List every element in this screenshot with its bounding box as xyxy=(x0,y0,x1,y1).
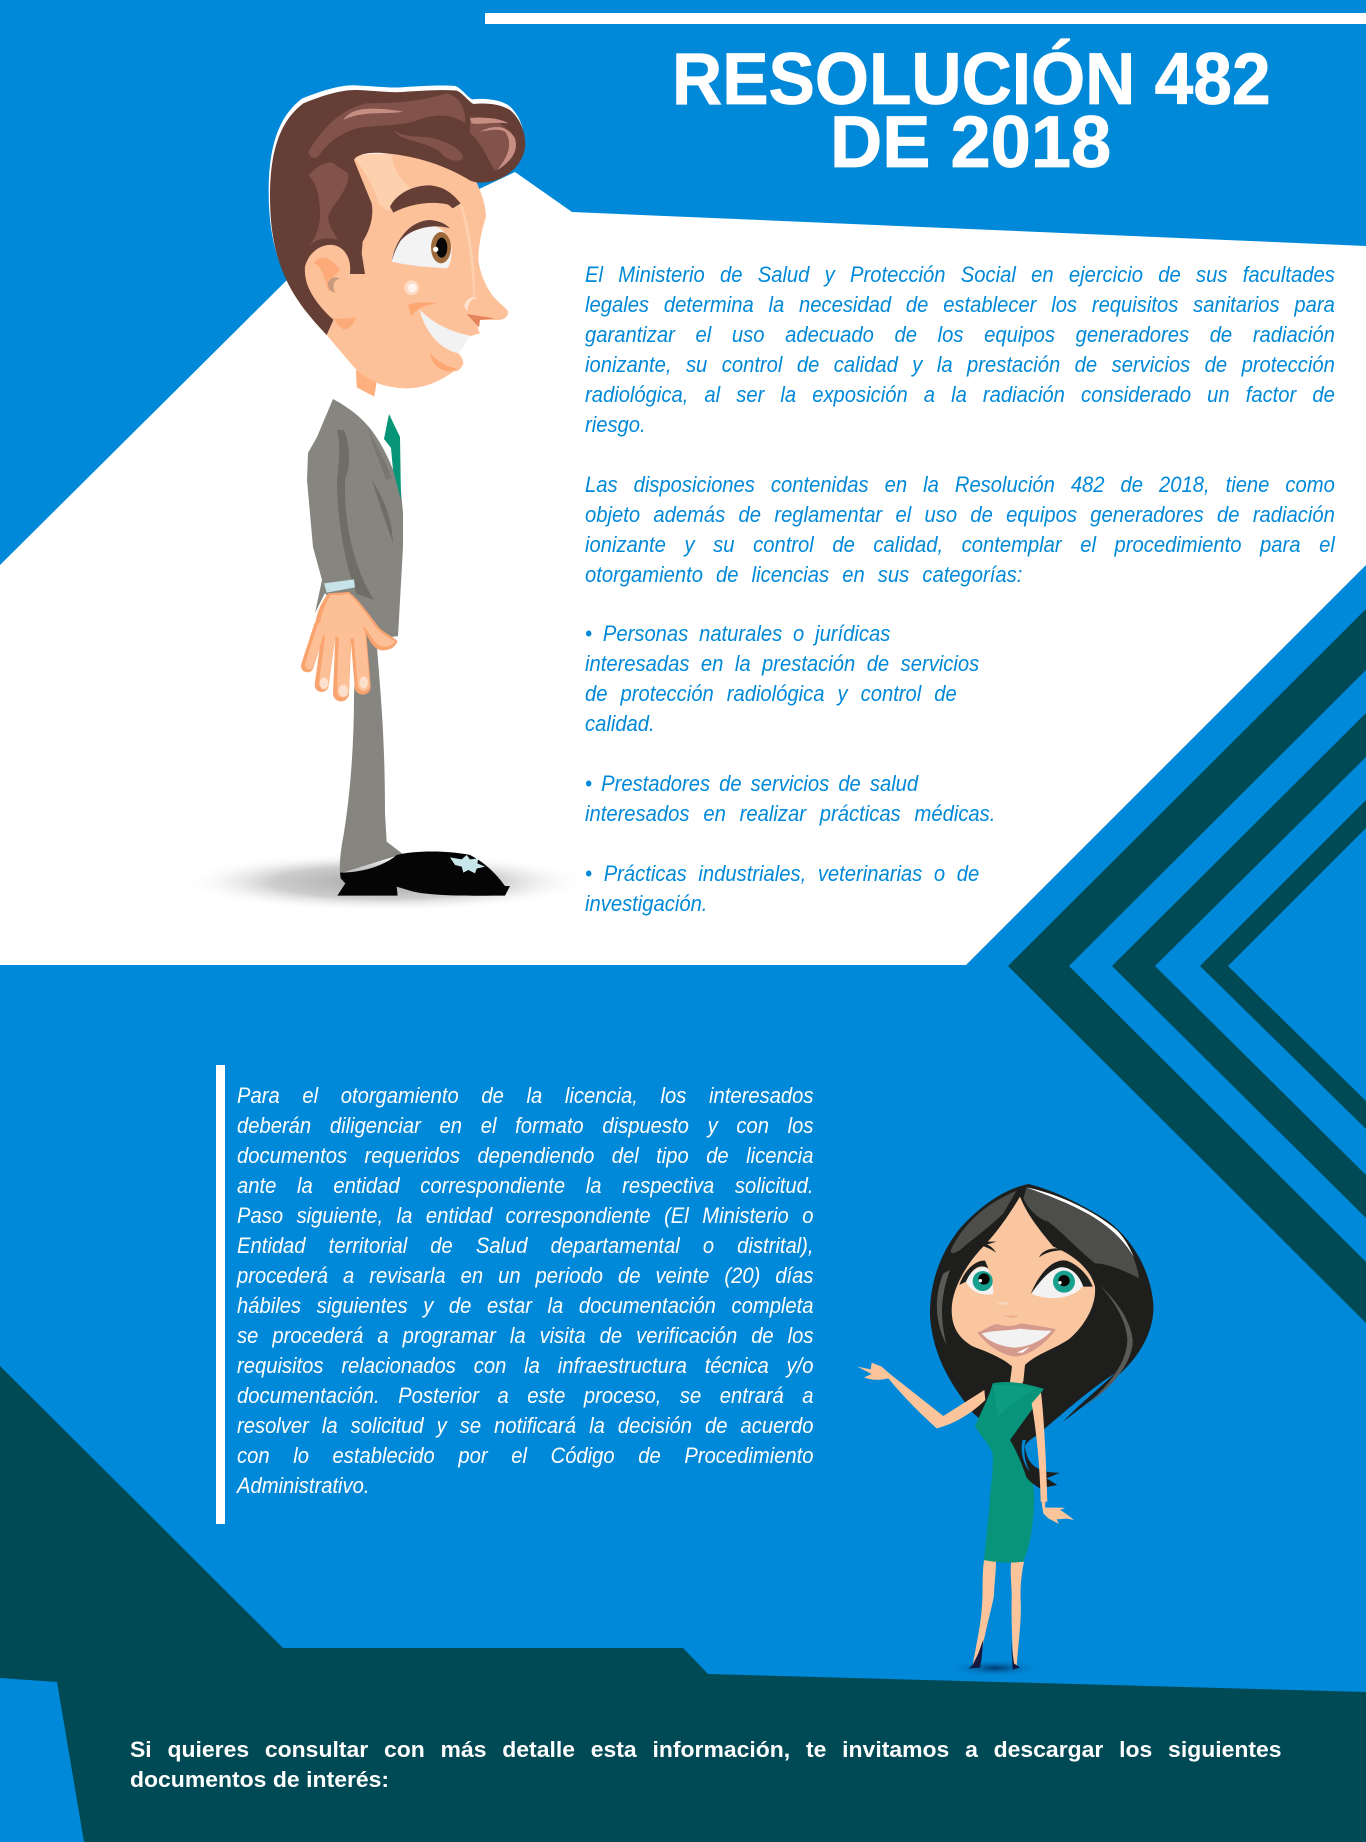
text block: licence procedure: Para el otorgamiento de la licencia, los interesados xyxy=(237,1083,814,1108)
text block: second paragraph: otorgamiento de licencias en sus categorías: xyxy=(585,562,1022,587)
text block: second paragraph: ionizante y su control de calidad, contemplar el procedimiento para el xyxy=(585,532,1335,557)
hair shine xyxy=(308,93,510,247)
text block: intro paragraph: garantizar el uso adecuado de los equipos generadores de radiación xyxy=(585,322,1335,347)
text block: licence procedure: documentos requeridos dependiendo del tipo de licencia xyxy=(237,1143,814,1168)
text block: intro paragraph: radiológica, al ser la exposición a la radiación considerado un factor de xyxy=(585,382,1335,407)
text block: bullet 2: interesados en realizar prácticas médicas. xyxy=(585,801,995,826)
woman right arm xyxy=(1032,1393,1047,1502)
woman legs xyxy=(968,1478,1074,1669)
text block: bullet 1: de protección radiológica y control de xyxy=(585,681,957,706)
man body lower xyxy=(337,623,510,896)
text block: bullet 1: • Personas naturales o jurídicas xyxy=(585,621,890,646)
text block: bullet 3: investigación. xyxy=(585,891,707,916)
text block: bullet 2 xyxy=(585,771,995,826)
white bar top xyxy=(485,13,1366,24)
illustration: man xyxy=(180,85,590,912)
text block: bullet 1: calidad. xyxy=(585,711,655,736)
forehead highlight xyxy=(355,154,412,212)
text block: licence procedure: Paso siguiente, la entidad correspondiente (El Ministerio o xyxy=(237,1203,814,1228)
text block: bullet 1: interesadas en la prestación de servicios xyxy=(585,651,979,676)
text block: licence procedure: requisitos relacionados con la infraestructura técnica y/o xyxy=(237,1353,814,1378)
hair shine xyxy=(1023,1187,1139,1278)
text block: intro paragraph xyxy=(585,262,1335,437)
man hand xyxy=(307,579,397,697)
title xyxy=(672,38,1271,183)
eye xyxy=(392,225,452,268)
text block: bullet 2: • Prestadores de servicios de salud xyxy=(585,771,918,796)
ear xyxy=(305,245,357,325)
text block: intro paragraph: legales determina la necesidad de establecer los requisitos sanitarios para xyxy=(585,292,1335,317)
hair outline xyxy=(269,85,524,330)
woman nose xyxy=(997,1302,1023,1317)
text block: bullet 3 xyxy=(585,861,979,916)
footer text xyxy=(130,1737,1282,1792)
title line 1: RESOLUCIÓN 482 xyxy=(672,39,1271,120)
woman right hand xyxy=(1040,1478,1074,1524)
woman eyes xyxy=(966,1267,993,1295)
text block: licence procedure: con lo establecido por el Código de Procedimiento xyxy=(237,1443,814,1468)
man tie xyxy=(384,414,401,500)
text block: licence procedure: se procederá a programar la visita de verificación de los xyxy=(237,1323,814,1348)
text block: intro paragraph: El Ministerio de Salud y Protección Social en ejercicio de sus facultades xyxy=(585,262,1335,287)
text block: intro paragraph: riesgo. xyxy=(585,412,646,437)
text block: licence procedure xyxy=(236,1083,814,1498)
footer text: Si quieres consultar con más detalle esta información, te invitamos a descargar los siguientes xyxy=(130,1737,1282,1762)
hair xyxy=(270,90,525,335)
woman mouth xyxy=(977,1323,1056,1357)
text block: licence procedure: resolver la solicitud y se notificará la decisión de acuerdo xyxy=(237,1413,814,1438)
text block: intro paragraph: ionizante, su control de calidad y la prestación de servicios de protección xyxy=(585,352,1335,377)
illustration: woman xyxy=(857,1184,1153,1677)
text block: bullet 3: • Prácticas industriales, veterinarias o de xyxy=(585,861,979,886)
face xyxy=(313,154,508,388)
nose xyxy=(464,297,477,312)
text block: bullet 1 xyxy=(585,621,979,736)
footer text: documentos de interés: xyxy=(130,1767,389,1792)
eyebrow xyxy=(390,185,461,213)
text block: second paragraph: objeto además de reglamentar el uso de equipos generadores de radiación xyxy=(585,502,1335,527)
text block: licence procedure: documentación. Posterior a este proceso, se entrará a xyxy=(237,1383,814,1408)
woman dress skirt xyxy=(984,1478,1034,1563)
woman dress bodice xyxy=(975,1382,1044,1502)
text block: licence procedure: deberán diligenciar en el formato dispuesto y con los xyxy=(237,1113,814,1138)
panel: dark footer band xyxy=(0,1366,1366,1842)
text block: licence procedure: ante la entidad correspondiente la respectiva solicitud. xyxy=(237,1173,814,1198)
text block: licence procedure: Administrativo. xyxy=(237,1473,369,1498)
woman hair xyxy=(930,1184,1153,1488)
panel: white upper section xyxy=(0,172,1366,965)
text block: second paragraph: Las disposiciones contenidas en la Resolución 482 de 2018, tiene como xyxy=(585,472,1335,497)
chevrons xyxy=(1008,609,1366,1323)
title line 2: DE 2018 xyxy=(830,102,1111,183)
smile xyxy=(408,302,437,316)
man jacket xyxy=(307,399,403,642)
text block: second paragraph xyxy=(585,472,1336,587)
jacket details xyxy=(337,428,393,600)
woman neck and arm xyxy=(1010,1363,1023,1383)
man head xyxy=(269,85,525,397)
text block: licence procedure: procederá a revisarla en un periodo de veinte (20) días xyxy=(237,1263,814,1288)
woman face xyxy=(952,1197,1095,1382)
text block: licence procedure: Entidad territorial de Salud departamental o distrital), xyxy=(237,1233,814,1258)
cheek sparkle xyxy=(404,280,419,295)
text block: licence procedure: hábiles siguientes y de estar la documentación completa xyxy=(237,1293,814,1318)
white bar beside lower text xyxy=(216,1065,225,1524)
